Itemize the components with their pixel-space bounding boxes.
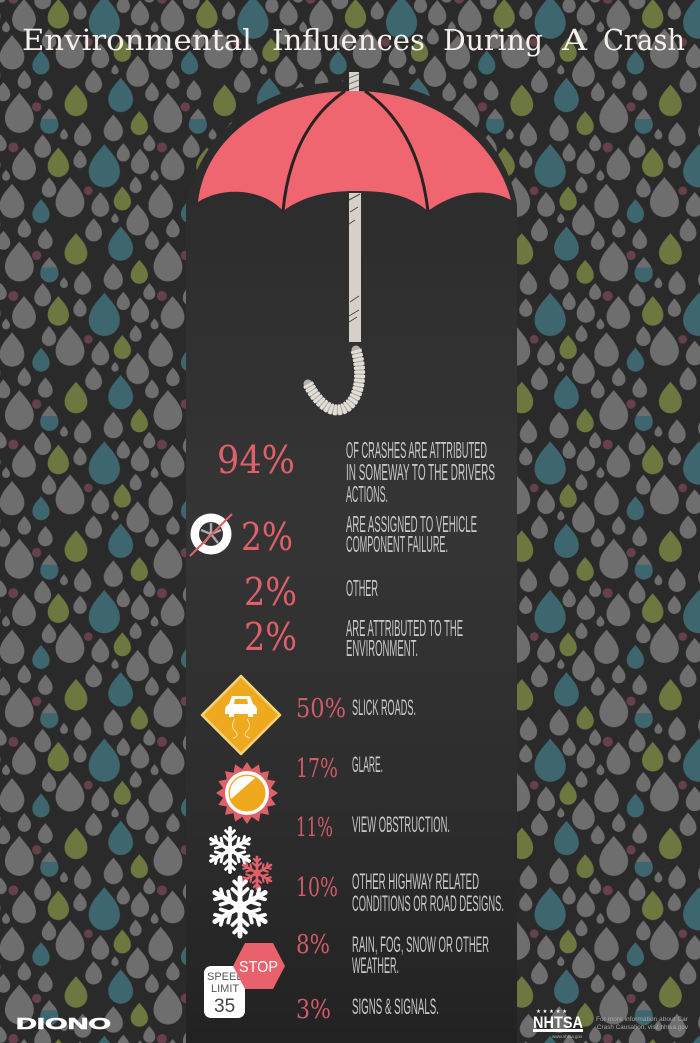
text: IN SOMEWAY TO THE DRIVERS [346, 459, 495, 485]
stat: 8 percent weather: 8% [296, 930, 330, 960]
icon: sun glare [216, 762, 278, 824]
stat: 94 percent: 94% [217, 438, 295, 482]
text: OF CRASHES ARE ATTRIBUTED [346, 437, 487, 463]
text: ARE ATTRIBUTED TO THE [346, 615, 463, 641]
stat: 17 percent glare: 17% [296, 754, 338, 784]
icon: speed limit sign: 35 [214, 996, 235, 1017]
stat: 2 percent environment: 2% [244, 615, 297, 659]
stat: 8 percent weather [296, 930, 489, 978]
icon: slick road sign [202, 676, 280, 754]
title [22, 23, 685, 57]
stat: 2 percent environment [244, 615, 463, 661]
logo: NHTSA [533, 1009, 583, 1039]
stat: 10 percent highway conditions: OTHER HIGHWAY RELATED [352, 869, 479, 894]
icon: stop sign: STOP [239, 959, 278, 976]
stat: 2 percent vehicle failure: COMPONENT FAILURE. [346, 531, 448, 557]
icon: umbrella [198, 72, 511, 410]
text: SIGNS & SIGNALS. [352, 994, 439, 1019]
stat: 11 percent view obstruction: 11% [296, 813, 333, 843]
text: SLICK ROADS. [352, 695, 416, 720]
title: Influences [272, 23, 425, 57]
source note [596, 1016, 689, 1031]
stat: 8 percent weather: WEATHER. [352, 953, 399, 978]
title: During [443, 23, 543, 57]
stat: 3 percent signs and signals: 3% [296, 995, 331, 1025]
icon: speed limit sign: LIMIT [211, 983, 239, 995]
text: VIEW OBSTRUCTION. [352, 812, 450, 837]
icon: snowflakes [208, 828, 273, 936]
text: OTHER [346, 575, 378, 601]
stat: 2 percent other: 2% [244, 570, 297, 614]
icon: stop sign [233, 943, 285, 989]
text: RAIN, FOG, SNOW OR OTHER [352, 932, 489, 957]
icon: crossed-out tire [190, 514, 232, 556]
source note: For more information about Car [596, 1016, 689, 1023]
stat: 2 percent other [244, 570, 378, 614]
source note: Crash Causation, visit nhtsa.gov [597, 1024, 689, 1031]
stat: 94 percent [217, 437, 495, 507]
stat: 11 percent view obstruction [296, 812, 450, 843]
title: A [561, 23, 588, 57]
stat: 10 percent highway conditions [296, 869, 504, 916]
stat: 94 percent: ACTIONS. [346, 481, 388, 507]
stat: 3 percent signs and signals [296, 994, 439, 1025]
stat: 2 percent vehicle failure [241, 511, 477, 559]
stat: 2 percent environment: ENVIRONMENT. [346, 635, 418, 661]
text: GLARE. [352, 752, 383, 777]
icon: speed limit sign [204, 966, 245, 1018]
icon: speed limit sign: SPEED [207, 971, 244, 983]
panel: central chalkboard column [186, 81, 517, 1043]
title: Crash [603, 23, 685, 57]
stat: 50 percent slick roads [296, 694, 416, 724]
logo: Diono: DIONO [16, 1016, 111, 1033]
stat: 2 percent vehicle failure: 2% [241, 515, 293, 559]
stat: 17 percent glare [296, 752, 383, 784]
title: Environmental [22, 23, 252, 57]
stat: 10 percent highway conditions: 10% [296, 873, 338, 903]
logo: NHTSA: ★★★★★ [536, 1009, 569, 1015]
logo: NHTSA: NHTSA [533, 1013, 583, 1032]
stat: 50 percent slick roads: 50% [296, 694, 346, 724]
text: ARE ASSIGNED TO VEHICLE [346, 511, 477, 537]
logo: NHTSA: www.nhtsa.gov [552, 1034, 583, 1039]
